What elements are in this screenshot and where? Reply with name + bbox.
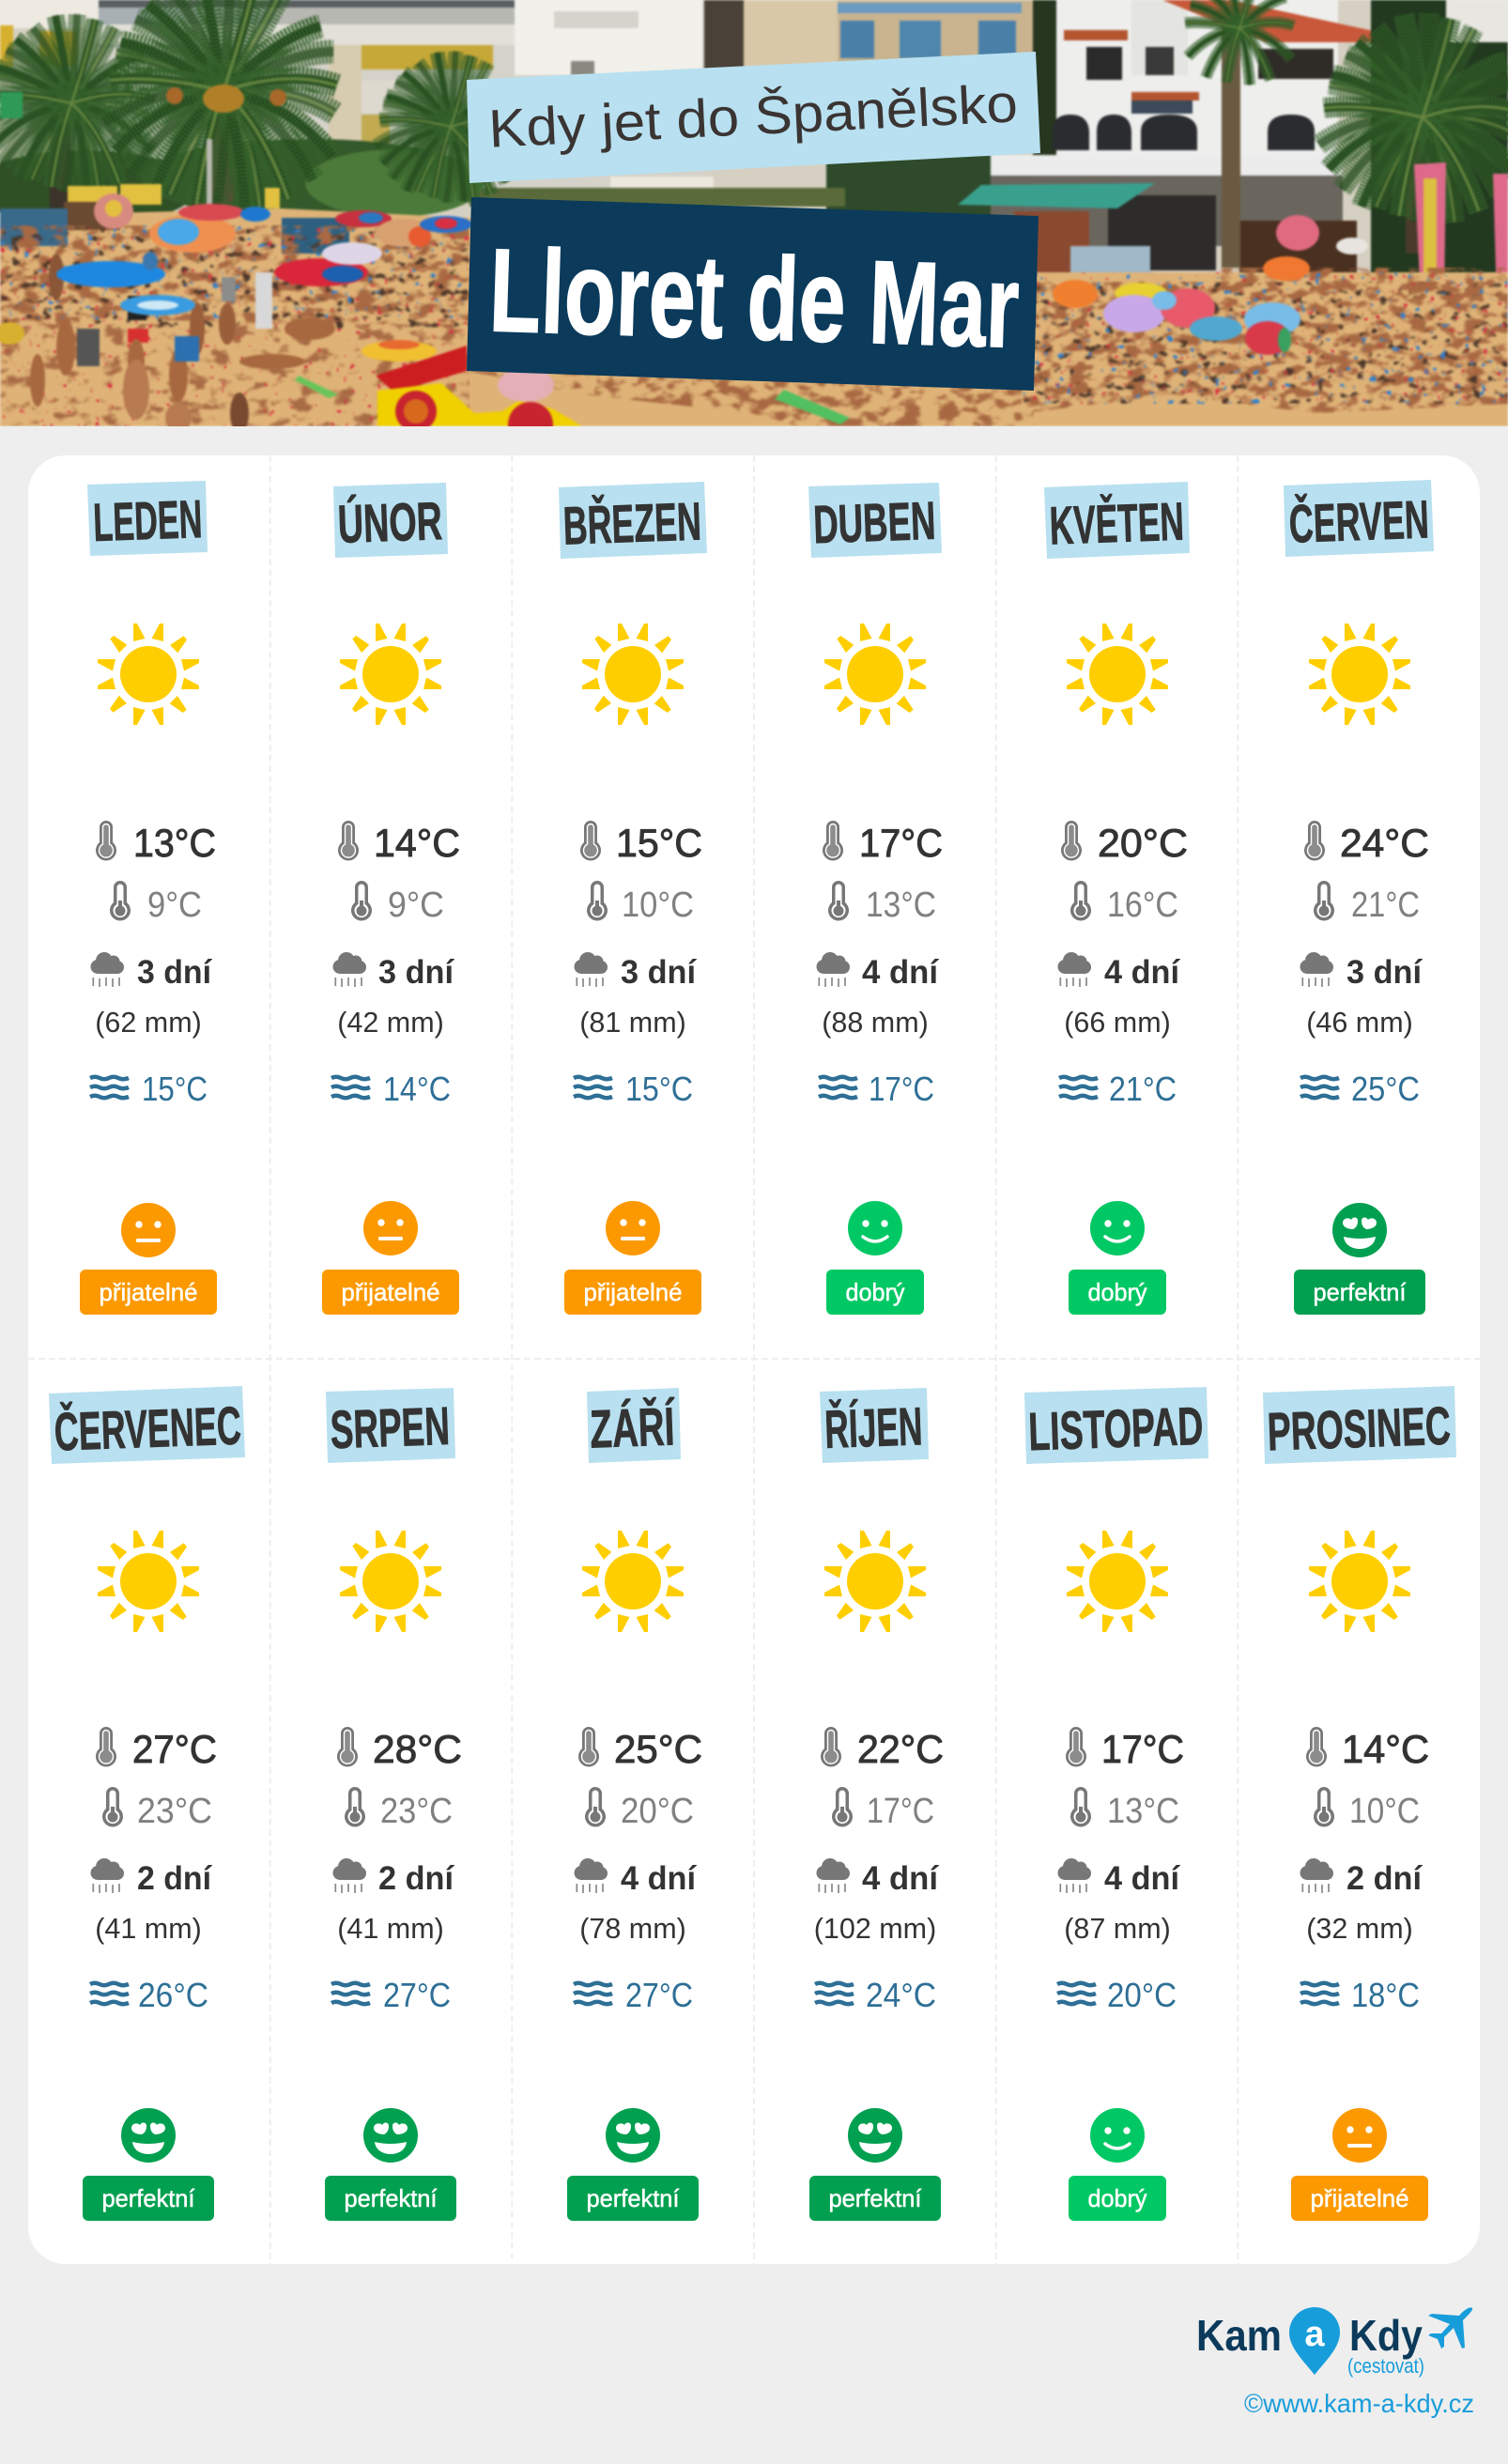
precipitation: (66 mm): [1064, 1007, 1171, 1039]
rain days: 4 dní: [621, 1860, 697, 1897]
month label: [587, 1388, 681, 1463]
month label: LEDEN: [92, 489, 203, 553]
water temperature: 17°C: [869, 1070, 934, 1108]
rain days: 3 dní: [137, 954, 212, 991]
month label: [87, 481, 208, 556]
water temperature: 24°C: [866, 1976, 936, 2014]
rain days: [90, 952, 212, 991]
rating: dobrý: dobrý: [1087, 2184, 1147, 2212]
max air temperature: 20°C: [1098, 821, 1188, 865]
water temperature: [819, 1070, 934, 1108]
max air temperature: 24°C: [1340, 821, 1429, 865]
precipitation: (102 mm): [814, 1913, 936, 1945]
month: listopad: [1024, 1387, 1208, 2221]
month label: ZÁŘÍ: [589, 1395, 677, 1460]
rating: perfektní: perfektní: [101, 2184, 195, 2212]
rain days: [332, 1858, 454, 1897]
rain days: [1300, 1858, 1423, 1897]
rain days: 3 dní: [1346, 954, 1423, 991]
icon: sun: [98, 624, 199, 725]
month label: KVĚTEN: [1049, 491, 1185, 556]
panel: calendar card: [28, 455, 1480, 2264]
min air temperature: [110, 881, 202, 925]
rain days: 2 dní: [1346, 1860, 1423, 1897]
min air temperature: 9°C: [388, 886, 444, 925]
icon: sun: [824, 624, 926, 725]
max air temperature: [1066, 1727, 1184, 1771]
min air temperature: 13°C: [1107, 1792, 1179, 1831]
min air temperature: [345, 1787, 453, 1831]
water temperature: 15°C: [142, 1070, 208, 1108]
month label: SRPEN: [330, 1396, 451, 1460]
rain days: [1057, 952, 1180, 991]
rating: perfektní: perfektní: [586, 2184, 680, 2212]
month label: ČERVEN: [1288, 488, 1430, 555]
max air temperature: [580, 821, 702, 865]
month label: [326, 1388, 455, 1463]
month label: [820, 1388, 929, 1463]
min air temperature: 16°C: [1107, 886, 1178, 925]
month label: ŘÍJEN: [823, 1395, 923, 1460]
max air temperature: 17°C: [859, 821, 943, 865]
water temperature: [1057, 1976, 1177, 2014]
website url: ©www.kam-a-kdy.cz: [1244, 2389, 1474, 2418]
water temperature: 26°C: [138, 1976, 208, 2014]
rating: přijatelné: přijatelné: [584, 1278, 682, 1306]
month label: [559, 482, 707, 559]
max air temperature: [338, 821, 460, 865]
rating: přijatelné: [564, 1201, 701, 1315]
water temperature: 20°C: [1107, 1976, 1177, 2014]
rain days: [1057, 1858, 1180, 1897]
rating: přijatelné: [80, 1203, 217, 1315]
month label: ČERVENEC: [54, 1395, 242, 1462]
rain days: [90, 1858, 212, 1897]
icon: sun: [582, 1531, 684, 1632]
max air temperature: 28°C: [373, 1727, 462, 1771]
precipitation: (32 mm): [1306, 1913, 1413, 1945]
rating: perfektní: perfektní: [1313, 1278, 1407, 1306]
icon: sun: [340, 624, 441, 725]
precipitation: (46 mm): [1306, 1007, 1413, 1039]
rating: přijatelné: přijatelné: [100, 1278, 197, 1306]
rain days: [817, 952, 939, 991]
rating: přijatelné: přijatelné: [1311, 2184, 1408, 2212]
precipitation: (78 mm): [579, 1913, 686, 1945]
max air temperature: 14°C: [374, 821, 460, 865]
max air temperature: 27°C: [132, 1727, 217, 1771]
min air temperature: 10°C: [622, 886, 694, 925]
water temperature: [1059, 1070, 1177, 1108]
icon: sun: [1067, 624, 1168, 725]
rating: perfektní: [325, 2108, 456, 2221]
min air temperature: 9°C: [147, 886, 202, 925]
water temperature: 25°C: [1351, 1070, 1420, 1108]
rating: dobrý: dobrý: [1087, 1278, 1147, 1306]
precipitation: (41 mm): [337, 1913, 444, 1945]
min air temperature: 21°C: [1351, 886, 1420, 925]
water temperature: [331, 1070, 451, 1108]
precipitation: (41 mm): [95, 1913, 202, 1945]
rain days: [817, 1858, 939, 1897]
rain days: [575, 1858, 697, 1897]
icon: sun: [824, 1531, 926, 1632]
icon: sun: [1067, 1531, 1168, 1632]
rating: perfektní: perfektní: [344, 2184, 438, 2212]
water temperature: [815, 1976, 936, 2014]
rating: dobrý: [1069, 2108, 1166, 2221]
month: červen: [1284, 480, 1434, 1315]
rain days: 2 dní: [378, 1860, 454, 1897]
month label: LISTOPAD: [1027, 1396, 1204, 1462]
rain days: 4 dní: [862, 954, 939, 991]
icon: sun: [1309, 624, 1410, 725]
month label: [49, 1386, 245, 1464]
photo: Lloret de Mar beach: [0, 0, 1508, 447]
month: září: [567, 1388, 702, 2221]
month: leden: [80, 481, 217, 1315]
rain days: [575, 952, 697, 991]
month: duben: [808, 483, 943, 1315]
water temperature: [1300, 1070, 1420, 1108]
month label: [1024, 1387, 1208, 1464]
rain days: 4 dní: [1104, 954, 1180, 991]
water temperature: 27°C: [383, 1976, 451, 2014]
banner: Lloret de Mar: Lloret de Mar: [487, 223, 1021, 373]
rating: perfektní: [567, 2108, 699, 2221]
max air temperature: 13°C: [133, 821, 216, 865]
month label: ÚNOR: [337, 491, 443, 555]
month label: [333, 483, 448, 558]
month label: DUBEN: [812, 491, 936, 555]
icon: sun: [98, 1531, 199, 1632]
min air temperature: 23°C: [137, 1792, 212, 1831]
rating: perfektní: [1294, 1203, 1425, 1315]
rain days: [332, 952, 454, 991]
rain days: 3 dní: [378, 954, 454, 991]
water temperature: [574, 1976, 693, 2014]
rating: přijatelné: [1291, 2108, 1428, 2221]
min air temperature: 20°C: [621, 1792, 694, 1831]
icon: map pin: [1289, 2307, 1340, 2375]
min air temperature: [828, 881, 936, 925]
min air temperature: [585, 1787, 694, 1831]
icon: sun: [1309, 1531, 1410, 1632]
water temperature: [1300, 1976, 1420, 2014]
month: únor: [322, 483, 460, 1315]
max air temperature: 25°C: [614, 1727, 702, 1771]
water temperature: 18°C: [1351, 1976, 1420, 2014]
rating: dobrý: [1069, 1201, 1166, 1315]
month: srpen: [325, 1388, 462, 2221]
icon: sun: [582, 624, 684, 725]
min air temperature: [1070, 881, 1178, 925]
precipitation: (81 mm): [579, 1007, 686, 1039]
month label: [808, 483, 942, 558]
min air temperature: 10°C: [1349, 1792, 1420, 1831]
rain days: 3 dní: [621, 954, 697, 991]
month label: [1284, 480, 1434, 557]
max air temperature: 17°C: [1101, 1727, 1184, 1771]
rating: perfektní: [809, 2108, 941, 2221]
logo: Kam a Kdy: Kdy: [1349, 2311, 1423, 2360]
min air temperature: [832, 1787, 934, 1831]
min air temperature: [102, 1787, 212, 1831]
precipitation: (88 mm): [822, 1007, 929, 1039]
min air temperature: [1314, 881, 1420, 925]
max air temperature: [823, 821, 943, 865]
logo: Kam a Kdy: [1196, 2307, 1472, 2378]
water temperature: 14°C: [383, 1070, 451, 1108]
banner: Kdy jet do Španělsko: [467, 52, 1040, 183]
max air temperature: 22°C: [857, 1727, 944, 1771]
max air temperature: 14°C: [1342, 1727, 1429, 1771]
precipitation: (87 mm): [1064, 1913, 1171, 1945]
icon: airplane: [1428, 2307, 1472, 2348]
precipitation: (62 mm): [95, 1007, 202, 1039]
min air temperature: [587, 881, 694, 925]
min air temperature: [1070, 1787, 1179, 1831]
rating: dobrý: dobrý: [845, 1278, 905, 1306]
logo: Kam a Kdy: Kam: [1196, 2311, 1282, 2360]
precipitation: (42 mm): [337, 1007, 444, 1039]
banner: Lloret de Mar: [467, 197, 1039, 391]
water temperature: 21°C: [1109, 1070, 1177, 1108]
water temperature: 15°C: [625, 1070, 693, 1108]
max air temperature: 15°C: [616, 821, 702, 865]
month: květen: [1044, 482, 1190, 1315]
rating: přijatelné: [322, 1201, 459, 1315]
month: březen: [559, 482, 707, 1315]
rain days: [1300, 952, 1423, 991]
water temperature: [90, 1070, 208, 1108]
max air temperature: [821, 1727, 944, 1771]
rating: perfektní: [83, 2108, 214, 2221]
rain days: 4 dní: [1104, 1860, 1180, 1897]
water temperature: [574, 1070, 693, 1108]
max air temperature: [1061, 821, 1188, 865]
icon: sun: [340, 1531, 441, 1632]
logo: Kam a Kdy: (cestovat): [1347, 2354, 1424, 2378]
water temperature: [90, 1976, 208, 2014]
min air temperature: 23°C: [380, 1792, 453, 1831]
max air temperature: [96, 1727, 217, 1771]
min air temperature: [351, 881, 444, 925]
rating: dobrý: [826, 1201, 924, 1315]
min air temperature: [1314, 1787, 1420, 1831]
month: říjen: [809, 1388, 944, 2221]
month label: [1044, 482, 1190, 559]
water temperature: [331, 1976, 451, 2014]
max air temperature: [96, 821, 216, 865]
month: prosinec: [1263, 1386, 1456, 2221]
water temperature: 27°C: [625, 1976, 693, 2014]
min air temperature: 13°C: [866, 886, 936, 925]
min air temperature: 17°C: [867, 1792, 934, 1831]
rain days: 4 dní: [862, 1860, 939, 1897]
rain days: 2 dní: [137, 1860, 212, 1897]
rating: přijatelné: přijatelné: [342, 1278, 439, 1306]
rating: perfektní: perfektní: [828, 2184, 922, 2212]
icon: map pin: a: [1304, 2315, 1325, 2354]
month label: BŘEZEN: [562, 490, 702, 557]
month: červenec: [49, 1386, 245, 2221]
banner: Kdy jet do Španělsko: Kdy jet do Španělsko: [487, 73, 1019, 160]
